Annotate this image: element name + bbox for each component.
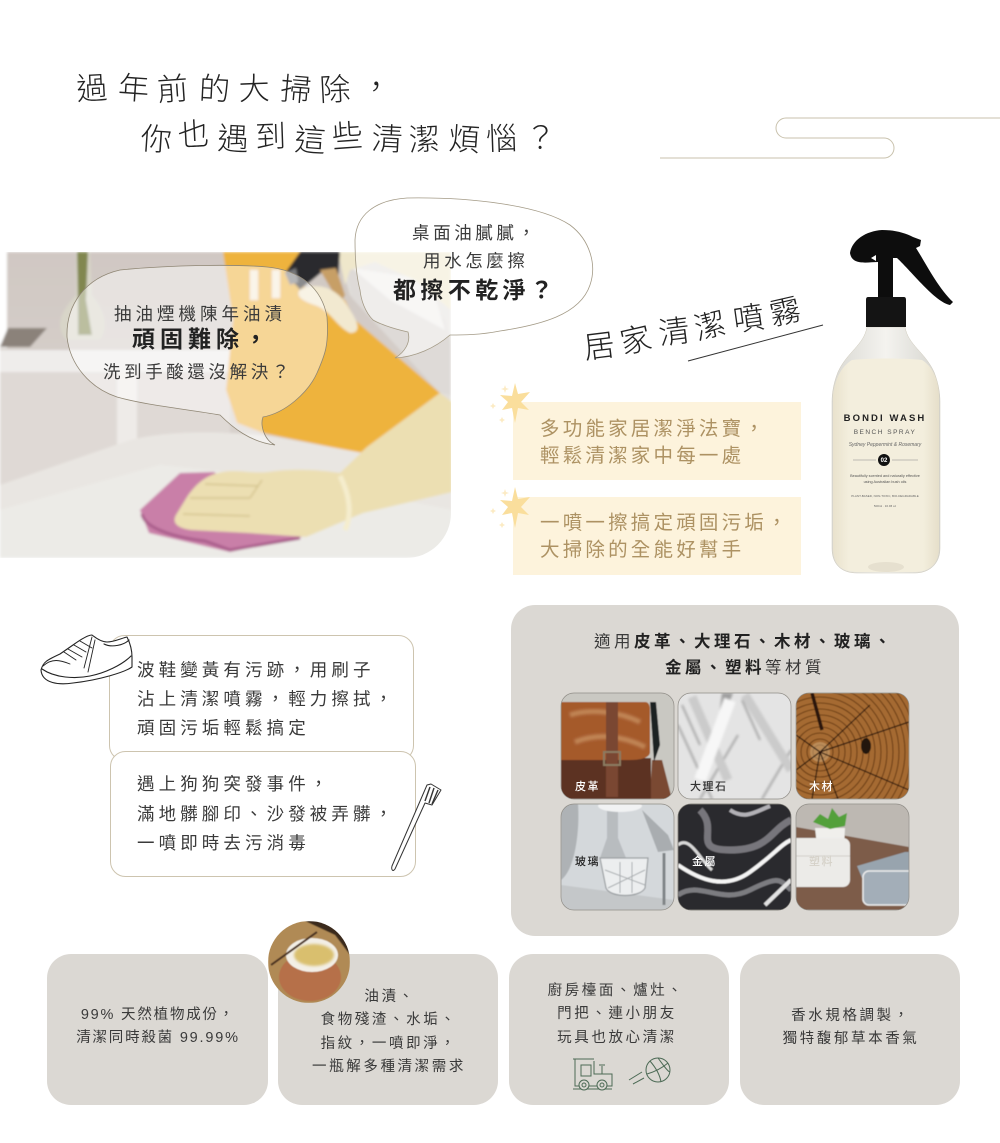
card: natural ingredients (47, 954, 268, 1105)
cap (866, 297, 906, 327)
material: glass (561, 800, 674, 910)
benefit 1 box: 輕鬆清潔家中每一處 (540, 445, 744, 467)
card: versatile stains: 食物殘渣、水垢、 (321, 1011, 457, 1028)
card: dog accidents (110, 752, 416, 876)
bottle label: Beautifully scented and naturally effective (850, 474, 920, 478)
bubble text: 桌面油膩膩， (412, 223, 539, 243)
liquid (833, 358, 939, 572)
card: fragrance (740, 954, 960, 1105)
panel: suitable materials (511, 605, 959, 936)
glass bottle (832, 327, 940, 573)
card: kitchen and toys: 玩具也放心清潔 (557, 1029, 677, 1046)
decorative rounded line (660, 118, 1000, 158)
icon: toy train (573, 1059, 612, 1090)
material: wood: 木材 (809, 779, 834, 793)
icon: toothbrush (392, 784, 441, 870)
bottle label: BONDI WASH (844, 413, 926, 424)
material: marble (678, 693, 791, 799)
material: marble: 大理石 (690, 779, 728, 793)
card: versatile stains (278, 954, 498, 1105)
material: plastic (790, 804, 915, 910)
material: metal (678, 804, 791, 910)
speech bubble: greasy tabletop (355, 198, 593, 358)
product: Bondi Wash bottle (832, 230, 953, 573)
pink cloth (140, 472, 302, 552)
bottle and hand (346, 263, 451, 400)
bottle label: PLANT-BASED, NON-TOXIC, BIO-DEGRADABLE (851, 494, 919, 498)
sprayer head (850, 230, 953, 305)
card: kitchen and toys: 廚房檯面、爐灶、 (548, 981, 684, 999)
photo: dirty bowl (268, 921, 350, 1003)
bubble text: 抽油煙機陳年油漬 (114, 304, 286, 324)
materials heading (594, 631, 894, 677)
card: shoe cleaning: 波鞋變黃有污跡，用刷子 (137, 660, 375, 680)
counter (0, 433, 450, 510)
bubble text (103, 304, 293, 382)
icon: star sparkle 2 (490, 487, 530, 528)
benefit 1 box (513, 402, 801, 480)
sprayer (285, 252, 340, 290)
card: fragrance: 香水規格調製， (791, 1007, 911, 1024)
icon: star sparkle 1 (490, 383, 530, 423)
card: kitchen and toys (509, 954, 729, 1105)
card: natural ingredients: 清潔同時殺菌 99.99% (76, 1029, 240, 1046)
card: shoe cleaning: 頑固污垢輕鬆搞定 (137, 718, 310, 738)
orange panel (223, 252, 440, 453)
vase (61, 254, 90, 338)
benefit 1 box: 多功能家居潔淨法寶， (540, 418, 767, 440)
materials heading: 適用皮革、大理石、木材、玻璃、 (594, 631, 894, 651)
photo: gloved hand wiping counter (0, 252, 452, 558)
bubble text: 用水怎麼擦 (423, 251, 528, 271)
handwritten subtitle: home cleaning spray: 居家清潔噴霧 (578, 282, 812, 370)
bubble text: 洗到手酸還沒解決？ (103, 362, 293, 382)
card: versatile stains: 油漬、 (364, 988, 416, 1005)
bubble text: 都擦不乾淨？ (393, 277, 557, 303)
card: dog accidents: 一噴即時去污消毒 (137, 833, 310, 853)
card: dog accidents: 滿地髒腳印、沙發被弄髒， (137, 804, 396, 824)
card: versatile stains: 一瓶解多種清潔需求 (312, 1057, 466, 1075)
card: dog accidents: 遇上狗狗突發事件， (137, 774, 331, 794)
material: plastic: 塑料 (809, 854, 834, 868)
bottle label: 500ml · 16.9fl oz (874, 504, 897, 508)
material: wood (796, 692, 910, 800)
card: shoe cleaning: 沾上清潔噴霧，輕力擦拭， (137, 689, 396, 709)
benefit 2 box: 一噴一擦搞定頑固污垢， (540, 512, 790, 534)
material: leather: 皮革 (575, 779, 600, 793)
rubber glove (175, 393, 452, 537)
benefit 2 box (513, 497, 801, 575)
title: handwritten heading: 你也遇到這些清潔煩惱？ (139, 108, 564, 162)
bottle label: using Australian bush oils (864, 480, 907, 484)
card: natural ingredients: 99% 天然植物成份， (81, 1006, 235, 1023)
bottle label (844, 413, 926, 508)
icon: basketball with motion lines (629, 1058, 670, 1084)
bubble text (393, 223, 557, 303)
title: handwritten heading: 過年前的大掃除， (75, 62, 401, 111)
title: handwritten heading (75, 62, 564, 162)
card: versatile stains: 指紋，一噴即淨， (321, 1035, 457, 1052)
benefit 2 box: 大掃除的全能好幫手 (540, 539, 744, 561)
speech bubble: range hood grease (67, 265, 328, 445)
material: metal: 金屬 (692, 854, 717, 868)
materials heading: 金屬、塑料等材質 (665, 657, 825, 677)
card: fragrance: 獨特馥郁草本香氣 (783, 1029, 919, 1047)
card: shoe cleaning (110, 636, 414, 760)
card: kitchen and toys: 門把、連小朋友 (557, 1005, 677, 1022)
material: glass: 玻璃 (575, 854, 600, 868)
icon: sneaker (41, 635, 132, 684)
material: leather (561, 693, 674, 799)
bottle label: 02 (881, 458, 888, 464)
bottle label: BENCH SPRAY (854, 429, 916, 436)
bottle label: Sydney Peppermint & Rosemary (849, 442, 922, 448)
bubble text: 頑固難除， (132, 326, 272, 352)
